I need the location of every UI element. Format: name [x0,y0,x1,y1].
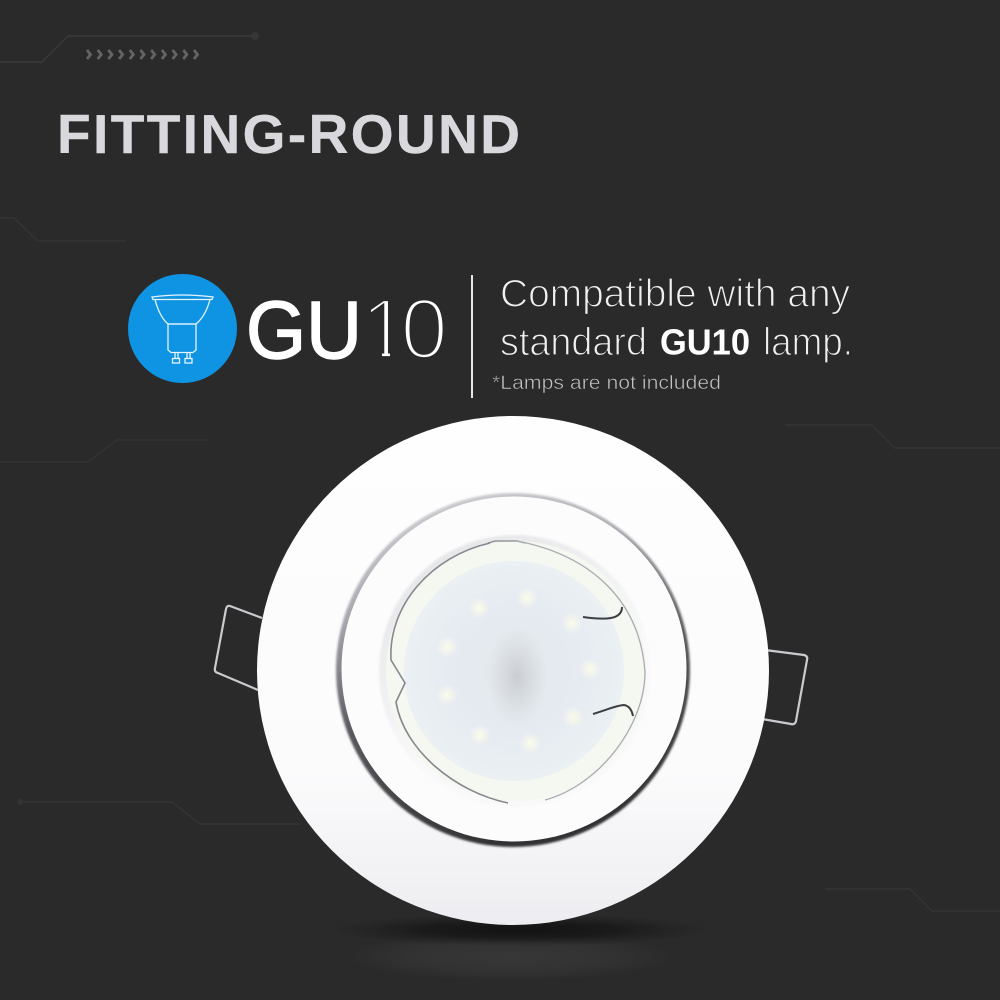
inner ring [342,496,686,842]
compatibility text: lamp. [763,321,853,364]
GU10 label [249,300,443,360]
lamp lens [404,561,624,781]
product: round fitting [215,416,807,925]
inner gap [336,493,690,847]
GU10 label: GU [246,285,362,376]
divider [471,275,473,398]
compatibility text: GU10 [660,322,750,362]
footnote: *Lamps are not included [492,372,721,394]
outer ring [257,416,769,925]
compatibility text: standard [500,321,647,364]
GU10 label: 1 [361,282,408,377]
compatibility text: Compatible with any [500,272,850,316]
spring clip left [215,606,262,690]
decorative chevrons [87,50,198,59]
GU10 label: 0 [400,282,448,377]
lamp rim [386,541,646,801]
spring clip right [762,650,807,724]
LED dots [436,587,601,754]
floor shadow [330,914,710,981]
retaining wire [391,541,645,803]
compatibility text [500,272,853,364]
icon: GU10 lamp [128,274,237,383]
title: FITTING-ROUND [57,103,520,165]
